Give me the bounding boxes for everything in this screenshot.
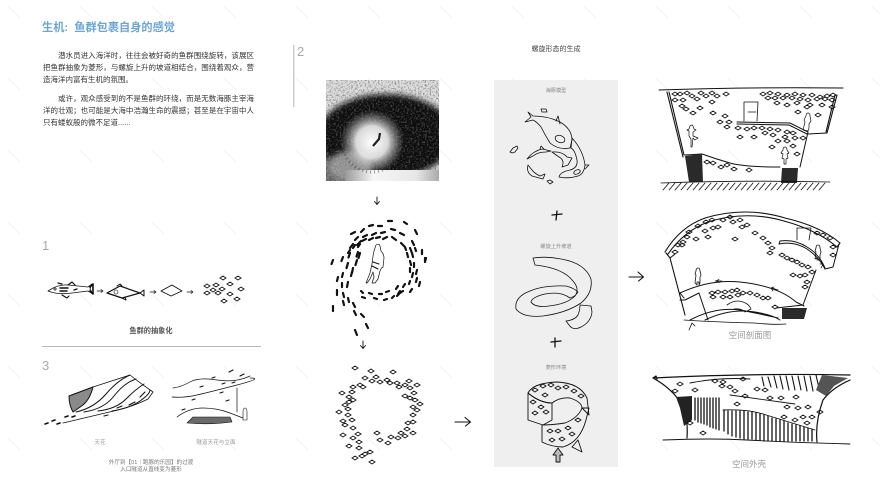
arrow (374, 197, 380, 204)
arrow (187, 290, 193, 294)
text block: introduction: 造海洋内富有生机的氛围。 (43, 74, 133, 84)
text block: introduction: 把鱼群抽象为菱形，与螺旋上升的坡道相结合，围绕着观众，营 (43, 62, 254, 72)
panel: form generation (494, 80, 618, 467)
text block: introduction: 只有蝼蚁般的微不足道...... (43, 117, 131, 127)
heading: spiral form generation: 螺旋形态的生成 (532, 44, 580, 53)
number 3: 3 (42, 358, 49, 373)
arrow (629, 272, 644, 281)
sketch: diamond-covered spiral band (528, 382, 589, 462)
text block: introduction: 洋的壮观；也可能是大海中浩瀚生命的震撼；甚至是在宇宙中人 (43, 105, 254, 115)
caption: fish abstraction: 鱼群的抽象化 (129, 326, 173, 335)
arrow (97, 290, 103, 292)
arrow (455, 418, 470, 426)
arrow (360, 341, 366, 348)
caption: transition note (109, 458, 194, 473)
sketch: ceiling (45, 375, 153, 424)
caption: ceiling: 天花 (94, 438, 106, 446)
sketch: exterior shell (653, 374, 850, 444)
icon: plus (551, 338, 561, 347)
caption: exterior shell: 空间外壳 (732, 459, 766, 469)
title: 生机: 鱼群包裹自身的感觉 (42, 20, 175, 34)
caption: transition note: 外厅到【01｜跑豚的乐园】的过渡 (109, 458, 194, 466)
label: diamond environment: 菱形环境 (546, 363, 566, 371)
icon: plus (552, 211, 562, 220)
text block: introduction (43, 50, 254, 127)
label: dolphin model: 海豚模型 (546, 86, 566, 94)
text block: introduction: 或许，观众感受到的不是鱼群的环绕，而是无数海豚主宰海 (58, 93, 254, 103)
text block: introduction: 潜水员进入海洋时，往往会被好奇的鱼群围绕旋转，该展区 (58, 50, 254, 60)
number 1: 1 (42, 238, 49, 253)
photo: diver in fish school (326, 80, 439, 181)
icon: fish with diamond body (107, 284, 144, 300)
sketch: tunnel ceiling and facade (172, 370, 255, 424)
sketch: spiral ramp (516, 257, 592, 329)
icon: single diamond (161, 285, 182, 296)
sketch: section view upper (659, 88, 843, 190)
caption: tunnel ceiling and facade: 隧道天花与立面 (196, 438, 236, 446)
label: spiral ramp: 螺旋上升坡道 (540, 242, 572, 250)
sketch: section view middle (665, 212, 840, 330)
icon: diamond school (204, 276, 244, 303)
diver (366, 244, 384, 283)
sketch: dolphins (510, 109, 589, 184)
icon: sketched fish (48, 282, 93, 298)
sketch: diamond ring (336, 366, 423, 464)
number 2: 2 (297, 44, 304, 59)
arrow (150, 290, 156, 294)
diagram: fish abstraction (48, 276, 244, 303)
caption: section view: 空间剖面图 (729, 330, 771, 340)
caption: transition note: 入口隧道从直线变为菱形 (120, 465, 182, 473)
sketch: spiral fish school with diver (332, 221, 426, 335)
